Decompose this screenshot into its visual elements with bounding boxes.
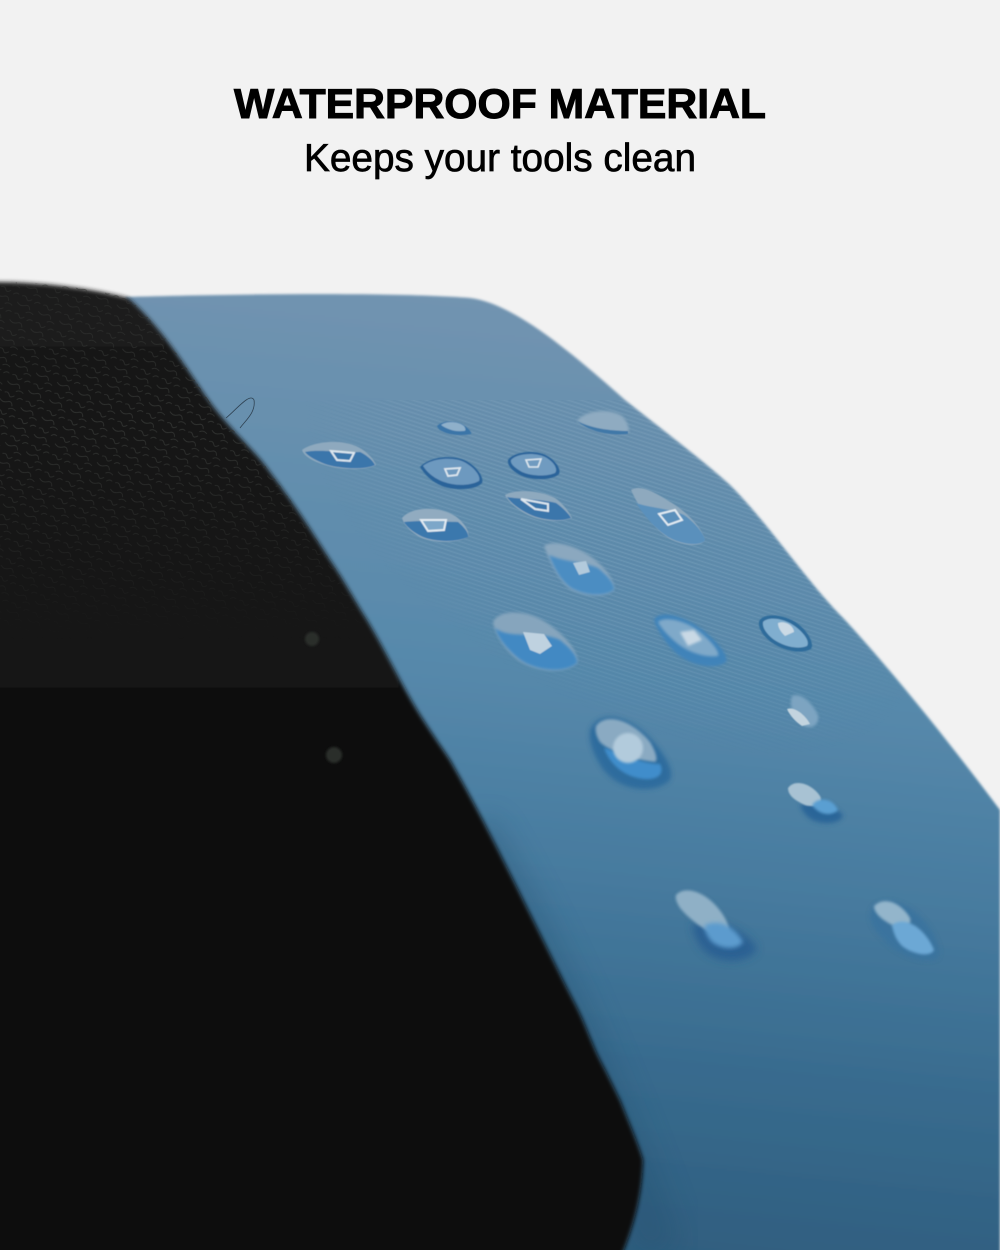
panel: blue waterproof fabric — [125, 294, 1000, 1250]
droplet 7 — [544, 543, 614, 596]
title: WATERPROOF MATERIAL — [234, 80, 766, 127]
droplet 17 — [577, 411, 629, 434]
droplet 14 — [676, 890, 757, 961]
subtitle: Keeps your tools clean — [304, 137, 696, 180]
droplet 1 — [302, 442, 376, 469]
droplet 4 — [505, 491, 572, 521]
water droplets — [302, 411, 939, 961]
droplet 10 — [759, 615, 812, 652]
shaded fold beside felt — [470, 830, 660, 1250]
droplet 5 — [402, 509, 468, 542]
droplet 9 — [654, 614, 726, 666]
droplet 11 — [787, 695, 818, 727]
droplet 8 — [493, 613, 577, 671]
fabric weave texture — [443, 406, 826, 691]
droplet 15 — [870, 901, 939, 960]
droplet 3 — [508, 452, 560, 479]
droplet 13 — [788, 783, 843, 823]
droplet 6 — [631, 488, 705, 545]
panel: black felt strip — [0, 280, 643, 1250]
droplet 12 — [590, 717, 671, 789]
felt lint specks — [305, 632, 342, 763]
loose fibre — [226, 398, 254, 428]
droplet 16 — [437, 422, 471, 435]
felt fibre texture — [0, 282, 340, 576]
droplet 2 — [420, 457, 482, 489]
